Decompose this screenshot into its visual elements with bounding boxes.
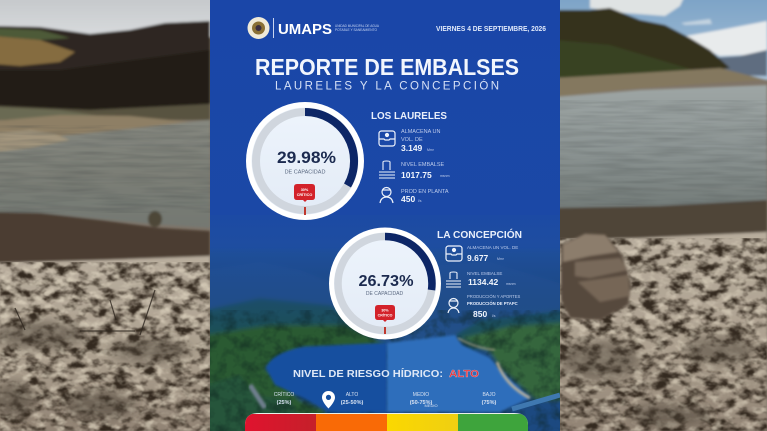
lake aerial photo (210, 249, 560, 431)
stat: plant production: 450 (401, 194, 415, 204)
stat: volume: ALMACENA UN (401, 129, 440, 135)
stat: plant production: l/s (418, 199, 422, 203)
critical threshold marker: CRÍTICO (297, 192, 312, 197)
icon: location pin marking current level (322, 391, 335, 408)
label: medium: MEDIO (413, 392, 429, 398)
stat: production: PRODUCCIÓN Y APORTES (467, 294, 520, 299)
critical threshold marker: 30% (381, 308, 389, 312)
header logo and UMAPS wordmark (248, 17, 380, 39)
icon: reservoir volume (446, 246, 462, 261)
critical threshold marker (294, 184, 315, 215)
stat: dam level: msnm (440, 174, 450, 178)
label: critical (274, 391, 294, 406)
label: medium (410, 392, 438, 408)
gauge: Los Laureles 29.98% (246, 102, 364, 220)
gauge: La Concepción 26.73% (329, 228, 441, 340)
stat: production (467, 294, 520, 319)
stat: volume: VOL. DE (401, 137, 423, 143)
risk colour bar (245, 413, 528, 431)
section heading: LOS LAURELES (371, 110, 447, 122)
stat: dam level: NIVEL EMBALSE (401, 162, 445, 168)
stat: volume (401, 129, 440, 153)
stat: dam level: 1134.42 (468, 277, 499, 287)
label: medium: MEDIO (424, 403, 438, 408)
gauge caption: DE CAPACIDAD (285, 170, 325, 176)
icon: dam level (446, 272, 461, 287)
stat: plant production (401, 189, 448, 202)
stat: dam level (401, 162, 450, 178)
stat: dam level (467, 272, 516, 285)
icon: plant operator (380, 188, 393, 203)
risk level heading: NIVEL DE RIESGO HÍDRICO: (293, 367, 443, 380)
stat: production: l/s (492, 314, 496, 318)
risk scale labels (274, 391, 497, 408)
stat: volume: Mm³ (497, 257, 505, 261)
stat: production: 850 (473, 309, 487, 319)
left background photo: drained reservoir (0, 0, 215, 431)
header logo and UMAPS wordmark: UMAPS (278, 21, 332, 38)
label: low: BAJO (482, 392, 496, 398)
stat: dam level: NIVEL EMBALSE (467, 271, 502, 276)
risk level heading (294, 368, 479, 378)
stat: dam level: msnm (506, 282, 516, 286)
critical threshold marker: 30% (301, 188, 309, 192)
subtitle: LAURELES Y LA CONCEPCIÓN (275, 80, 499, 92)
icon: reservoir volume (379, 131, 395, 146)
icon: dam level (379, 161, 395, 178)
stat: volume: ALMACENA UN VOL. DE (467, 245, 518, 250)
section heading: LA CONCEPCIÓN (437, 228, 522, 241)
icon: plant operator (448, 298, 459, 313)
gauge value: 29.98% (277, 148, 336, 167)
stat: volume: 9.677 (467, 253, 489, 263)
header logo and UMAPS wordmark: POTABLE Y SANEAMIENTO (335, 28, 377, 32)
section: Los Laureles stats (371, 110, 450, 204)
right background photo: reservoir and rock (555, 0, 767, 431)
risk level heading: ALTO (449, 368, 479, 380)
section: La Concepción stats (437, 228, 522, 319)
gauge caption: DE CAPACIDAD (366, 291, 403, 297)
title: REPORTE DE EMBALSES (255, 54, 519, 80)
gauge value: 26.73% (358, 273, 414, 290)
header logo and UMAPS wordmark: UNIDAD MUNICIPAL DE AGUA (335, 24, 380, 28)
label: critical: CRÍTICO (274, 391, 294, 398)
central report panel (205, 0, 565, 431)
stat: volume (467, 246, 518, 261)
label: critical: (25%) (277, 400, 292, 406)
critical threshold marker: CRÍTICO (378, 312, 393, 318)
stat: volume: Mm³ (427, 148, 435, 152)
critical threshold marker (375, 305, 395, 334)
label: high (341, 392, 363, 406)
stat: plant production: PROD EN PLANTA (401, 189, 449, 195)
label: high: ALTO (346, 392, 358, 398)
stat: production: PRODUCCIÓN DE PTAPC (467, 301, 518, 306)
report date: VIERNES 4 DE SEPTIEMBRE, 2026 (436, 26, 546, 33)
stat: volume: 3.149 (401, 143, 423, 153)
stat: dam level: 1017.75 (401, 170, 432, 180)
label: low (482, 392, 497, 406)
label: high: (25-50%) (341, 400, 363, 406)
label: low: (75%) (482, 400, 497, 406)
label: medium: (50-75%) (410, 400, 432, 406)
